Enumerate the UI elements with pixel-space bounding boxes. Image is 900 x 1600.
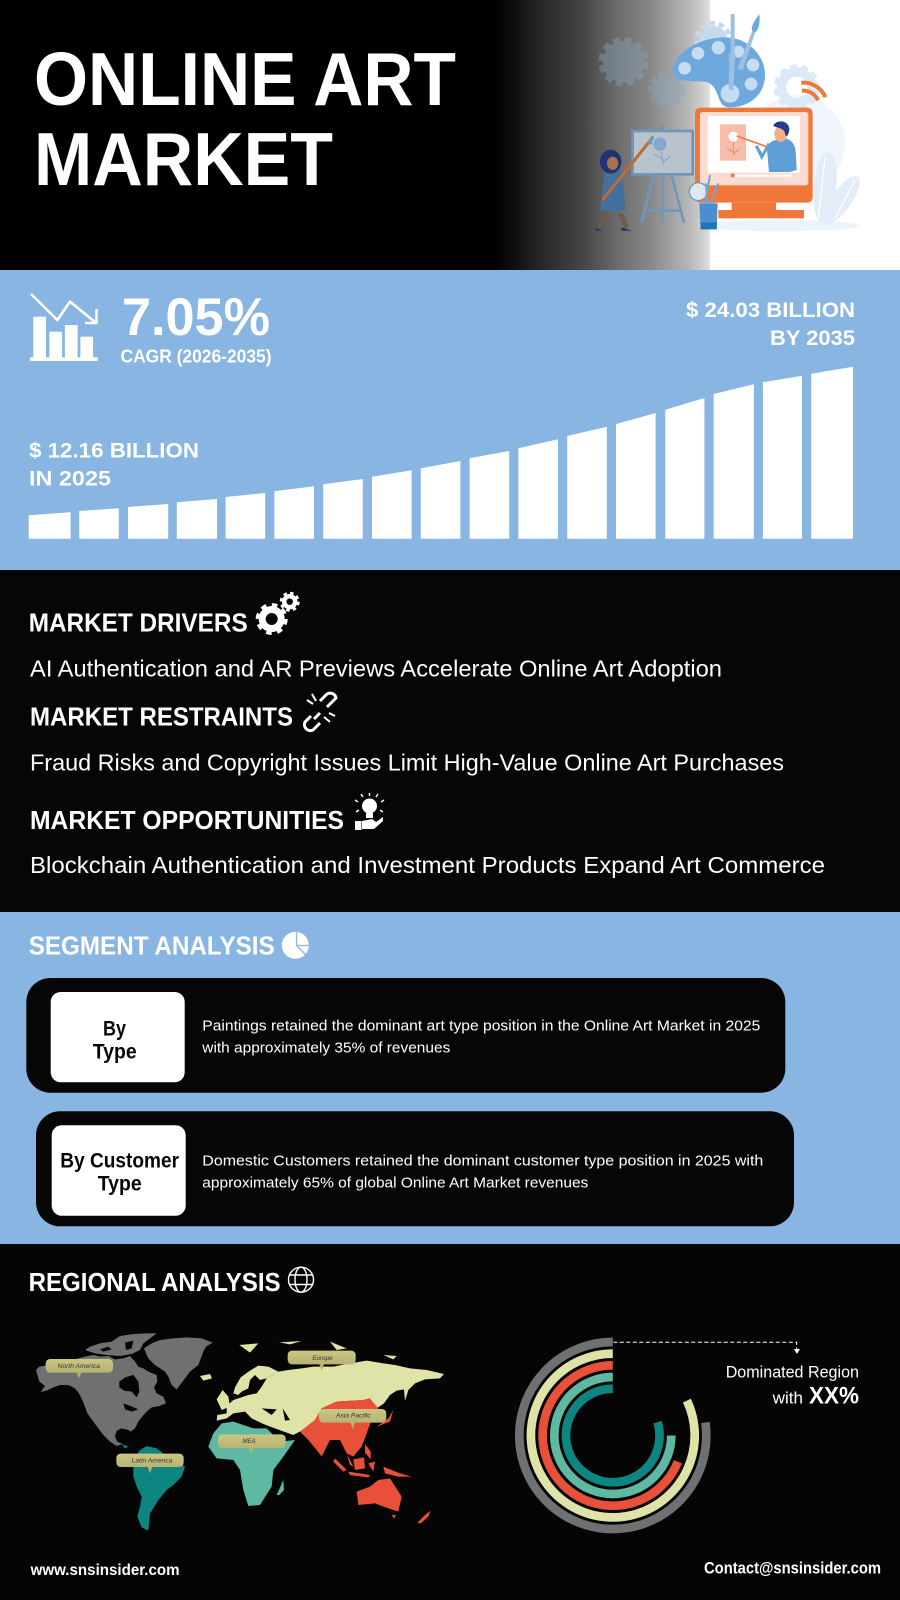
label box: by customer type: Type [98, 1172, 142, 1195]
icon: light bulb in hand [355, 793, 384, 830]
region: Latin America [122, 1444, 185, 1531]
start value label [29, 439, 199, 490]
callout: Asia Pacific: Asia Pacific [335, 1413, 371, 1420]
header gradient fade [493, 0, 711, 270]
callout: dominated region: XX% [809, 1383, 859, 1410]
label box: by type: Type [93, 1040, 137, 1063]
dashed leader arrow [613, 1342, 800, 1354]
callout: MEA: MEA [242, 1438, 256, 1445]
title [34, 37, 456, 201]
label box: by customer type: By Customer [60, 1150, 179, 1173]
title: ONLINE ART [34, 37, 456, 121]
end value label: $ 24.03 BILLION [686, 298, 855, 322]
callout: dominated region [726, 1364, 859, 1410]
start value label: $ 12.16 BILLION [29, 439, 199, 463]
world map [36, 1333, 444, 1531]
card: by type [26, 978, 785, 1093]
callout: Latin America [116, 1454, 184, 1473]
panel: segment analysis [0, 912, 900, 1244]
footer: website: www.snsinsider.com [30, 1562, 180, 1579]
heading: regional analysis: REGIONAL ANALYSIS [29, 1267, 281, 1297]
text: restraints summary: Fraud Risks and Copyright Issues Limit High-Value Online Art Purchases [30, 750, 784, 776]
text: by type finding [201, 1019, 760, 1057]
panel: market dynamics [0, 570, 900, 912]
illustration: online artist [595, 14, 866, 231]
heading: market drivers: MARKET DRIVERS [29, 608, 248, 638]
icon: gears [258, 593, 298, 633]
text: by type finding: Paintings retained the dominant art type position in the Online Art Market in 2025 [202, 1019, 760, 1035]
region: Europe and Russia [200, 1341, 444, 1435]
callout: dominated region: Dominated Region [726, 1364, 859, 1382]
footer: contact: Contact@snsinsider.com [704, 1559, 881, 1577]
text: by customer type finding: approximately 65% of global Online Art Market revenues [202, 1176, 588, 1192]
callout: dominated region: with [772, 1390, 803, 1408]
callout: Asia Pacific [319, 1409, 386, 1429]
region: Asia Pacific [300, 1398, 431, 1523]
text: opportunities summary: Blockchain Authentication and Investment Products Expand Art Commerce [30, 852, 825, 878]
icon: pie chart [282, 932, 309, 959]
end value label [686, 298, 855, 350]
callout: Europe: Europe [312, 1355, 333, 1362]
heading: market opportunities: MARKET OPPORTUNITIES [30, 805, 344, 835]
callout: North America [46, 1359, 113, 1378]
callout: Latin America: Latin America [132, 1458, 173, 1465]
text: by customer type finding [202, 1154, 763, 1192]
region: North America [36, 1333, 213, 1446]
text: by type finding: with approximately 35% of revenues [201, 1041, 450, 1057]
CAGR label: CAGR (2026-2035) [120, 347, 272, 367]
start value label: IN 2025 [29, 466, 111, 490]
radial bar chart [519, 1342, 706, 1529]
heading: segment analysis: SEGMENT ANALYSIS [29, 930, 275, 960]
callout: Europe [288, 1351, 356, 1371]
icon: broken chain [304, 693, 336, 731]
region: Middle East and Africa [208, 1422, 295, 1506]
panel: market size forecast [0, 270, 900, 570]
icon: globe [288, 1267, 314, 1292]
header panel [0, 0, 900, 270]
callout: MEA [218, 1434, 286, 1454]
label box: by type [51, 992, 185, 1082]
text: drivers summary: AI Authentication and AR Previews Accelerate Online Art Adoption [30, 656, 722, 682]
text: by customer type finding: Domestic Customers retained the dominant customer type position in 2025 with [202, 1154, 763, 1170]
label box: by customer type [52, 1125, 186, 1216]
panel: regional analysis [0, 1244, 900, 1600]
bar chart [29, 367, 853, 539]
end value label: BY 2035 [770, 326, 855, 350]
heading: market restraints: MARKET RESTRAINTS [30, 702, 293, 732]
label box: by type: By [103, 1018, 126, 1041]
callout: North America: North America [58, 1363, 100, 1370]
icon: chart with falling line [30, 294, 98, 361]
title: MARKET [34, 117, 333, 201]
card: by customer type [36, 1111, 794, 1226]
CAGR value: 7.05% [122, 288, 270, 347]
